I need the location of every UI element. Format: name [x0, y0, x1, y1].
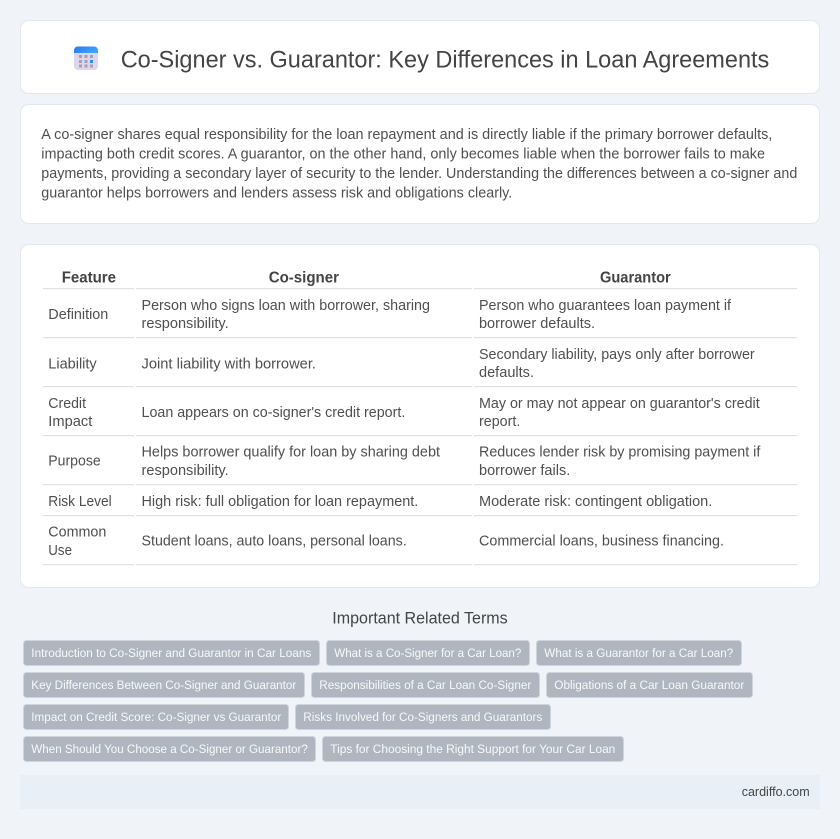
row: credit impact: Loan appears on co-signer's credit report.: [142, 405, 405, 421]
row: definition: borrower defaults.: [479, 316, 595, 332]
chip: [24, 704, 288, 730]
row: credit impact: report.: [479, 414, 520, 430]
row: purpose: Helps borrower qualify for loan by sharing debt: [142, 445, 440, 461]
row: credit impact: Credit: [48, 396, 86, 412]
chip: [536, 640, 742, 666]
chip: Impact on Credit Score: Co-Signer vs Guarantor: [31, 710, 281, 724]
row: definition: Definition: [48, 307, 108, 323]
table header row: Feature: [62, 270, 116, 287]
summary text: [41, 127, 797, 201]
row: common use: [48, 525, 724, 559]
row: common use: Student loans, auto loans, personal loans.: [142, 534, 407, 550]
row: liability: [48, 347, 755, 381]
row: risk level: Risk Level: [48, 494, 112, 510]
footer: [20, 775, 820, 809]
row: definition: Person who signs loan with borrower, sharing: [142, 298, 430, 314]
row: liability: Liability: [48, 356, 98, 372]
panel: header: [20, 20, 820, 94]
summary text: impacting both credit scores. A guarantor, on the other hand, only becomes liable when the borrower fails to make: [41, 146, 765, 162]
row: risk level: High risk: full obligation for loan repayment.: [142, 494, 418, 510]
summary text: A co-signer shares equal responsibility for the loan repayment and is directly liable if the primary borrower defaults,: [41, 127, 772, 143]
title: Co-Signer vs. Guarantor: Key Differences in Loan Agreements: [121, 46, 769, 73]
summary text: payments, providing a secondary layer of security to the lender. Understanding the differences between a co-signer and: [41, 166, 797, 182]
footer: cardiffo.com: [742, 785, 810, 799]
heading: related terms: Important Related Terms: [332, 609, 508, 627]
chip: Obligations of a Car Loan Guarantor: [554, 678, 744, 692]
row: liability: Joint liability with borrower.: [142, 356, 316, 372]
row: credit impact: [48, 396, 760, 430]
chip: What is a Guarantor for a Car Loan?: [544, 646, 733, 660]
chip: [24, 736, 316, 762]
table header row: Co-signer: [269, 270, 339, 287]
row: definition: Person who guarantees loan payment if: [479, 298, 731, 314]
chip: [312, 672, 540, 698]
row: definition: [48, 298, 731, 332]
chip: Introduction to Co-Signer and Guarantor in Car Loans: [31, 646, 311, 660]
panel: comparison table: [20, 244, 820, 588]
chip: [24, 640, 320, 666]
table header row: [62, 270, 671, 287]
row: common use: Common: [48, 525, 106, 541]
row: credit impact: May or may not appear on guarantor's credit: [479, 396, 760, 412]
chip: [296, 704, 550, 730]
chip: [322, 736, 624, 762]
chip: [326, 640, 530, 666]
summary text: guarantor helps borrowers and lenders assess risk and obligations clearly.: [41, 185, 512, 201]
row: purpose: Reduces lender risk by promising payment if: [479, 445, 760, 461]
chip: Tips for Choosing the Right Support for Your Car Loan: [330, 742, 615, 756]
chip: When Should You Choose a Co-Signer or Guarantor?: [31, 742, 308, 756]
chip: Responsibilities of a Car Loan Co-Signer: [319, 678, 531, 692]
icon: calendar: [74, 46, 98, 70]
panel: summary: [20, 104, 820, 224]
row: risk level: Moderate risk: contingent obligation.: [479, 494, 712, 510]
row: liability: Secondary liability, pays only after borrower: [479, 347, 755, 363]
table header row: Guarantor: [600, 270, 671, 287]
row: definition: responsibility.: [142, 316, 229, 332]
row: common use: Use: [48, 543, 72, 559]
chip: What is a Co-Signer for a Car Loan?: [334, 646, 521, 660]
row: liability: defaults.: [479, 365, 534, 381]
row: purpose: [48, 445, 760, 479]
row: common use: Commercial loans, business financing.: [479, 534, 724, 550]
row: purpose: borrower fails.: [479, 463, 570, 479]
chip: [546, 672, 752, 698]
chip: Risks Involved for Co-Signers and Guarantors: [303, 710, 542, 724]
row: credit impact: Impact: [48, 414, 92, 430]
related terms chips: [24, 640, 752, 762]
chip: Key Differences Between Co-Signer and Guarantor: [31, 678, 296, 692]
row: purpose: responsibility.: [142, 463, 229, 479]
row: risk level: [48, 494, 712, 510]
chip: [24, 672, 304, 698]
row: purpose: Purpose: [48, 454, 101, 470]
